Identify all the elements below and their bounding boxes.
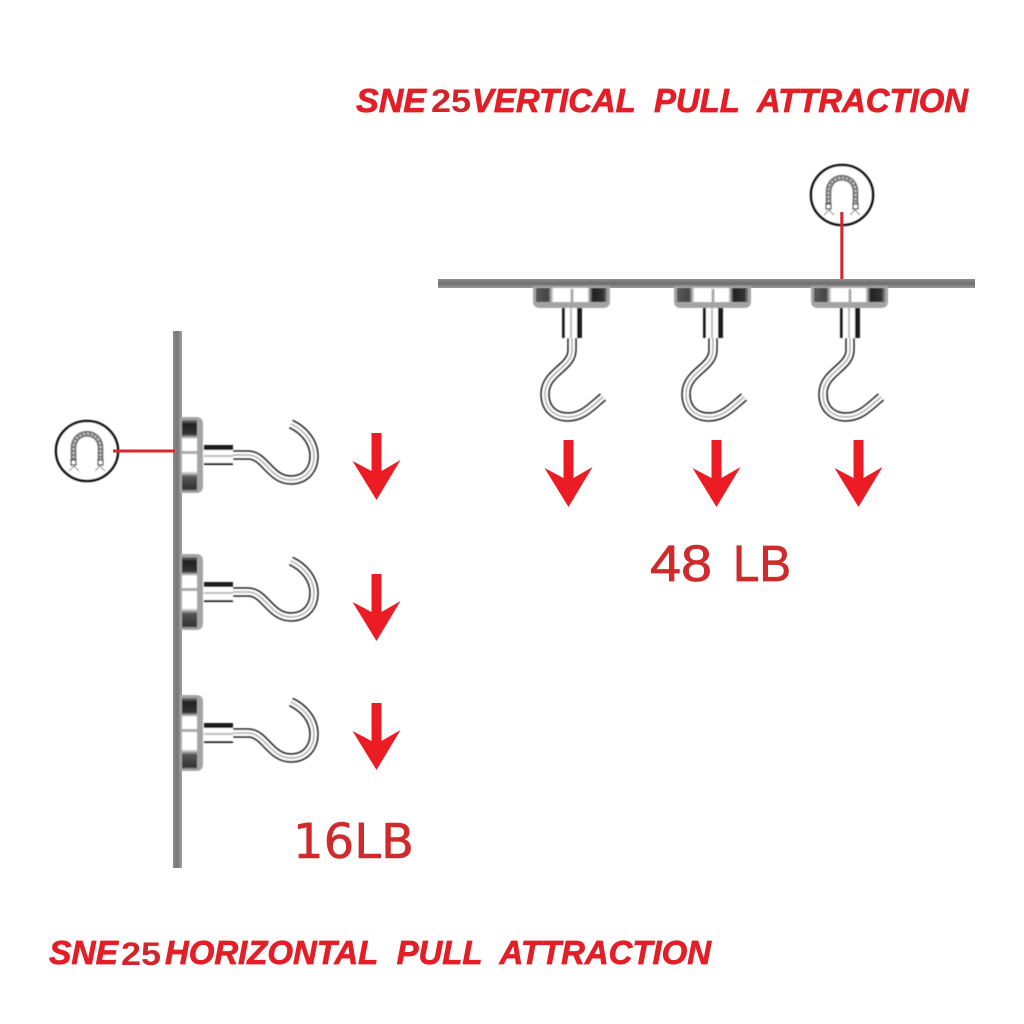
magnetic hook 2, ceiling: [674, 286, 751, 417]
arrow: down 3, vertical setup: [834, 440, 882, 507]
magnetic hook 2, wall: [180, 554, 314, 630]
red connector line, horizontal setup: [113, 450, 175, 452]
vertical pull value: [650, 535, 791, 592]
title: horizontal pull attraction: 25: [121, 936, 161, 972]
arrow: down 3, horizontal setup: [352, 703, 400, 770]
magnetic hook 3, ceiling: [811, 286, 888, 417]
vertical steel plate: [173, 331, 182, 868]
arrow: down 1, vertical setup: [544, 440, 592, 507]
vertical pull value: LB: [733, 535, 791, 592]
icon: magnet symbol, horizontal setup: [56, 421, 118, 481]
horizontal steel plate: [438, 279, 975, 288]
arrow: down 1, horizontal setup: [352, 433, 400, 500]
horizontal pull value: 16LB: [293, 814, 414, 870]
arrow: down 2, vertical setup: [692, 440, 740, 507]
icon: magnet symbol, vertical setup: [811, 165, 873, 225]
title: horizontal pull attraction: SNE: [49, 934, 119, 971]
title: horizontal pull attraction: HORIZONTAL PULL ATTRACTION: [165, 934, 712, 971]
arrow: down 2, horizontal setup: [352, 574, 400, 641]
red connector line, vertical setup: [840, 212, 843, 280]
magnetic hook 3, wall: [180, 695, 314, 771]
magnetic hook 1, ceiling: [533, 286, 610, 417]
magnetic hook 1, wall: [180, 417, 314, 493]
title: vertical pull attraction: SNE: [356, 82, 427, 119]
vertical pull value: 48: [650, 535, 712, 592]
title: vertical pull attraction: VERTICAL PULL ATTRACTION: [472, 82, 969, 119]
title: vertical pull attraction: 25: [431, 83, 471, 119]
